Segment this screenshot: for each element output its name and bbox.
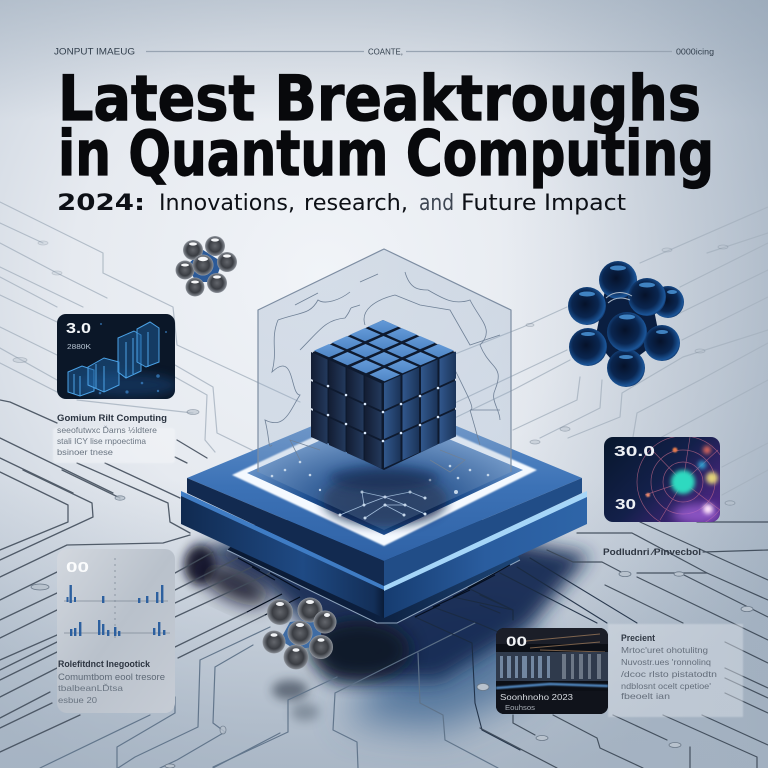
burst rings: [636, 437, 720, 522]
card: quantum burst image: 30.0: [614, 443, 655, 460]
card: signal chart: 00: [66, 559, 89, 576]
cube left faces: [311, 352, 382, 468]
title: Latest Breaktroughs: [58, 62, 701, 135]
upper slab: [187, 396, 582, 586]
panel: present: fbeoelt ian: [621, 691, 670, 701]
subtitle: and: [419, 191, 454, 216]
card: signal chart: Comumtbom eool tresore: [58, 672, 165, 682]
chart axes: [64, 558, 170, 640]
header strip: JONPUT IMAEUG: [54, 46, 135, 56]
icon: blue molecule right: [568, 261, 684, 387]
subtitle: 2024:: [57, 191, 145, 216]
text block: computing: bsinoer tnese: [57, 447, 113, 457]
isometric wireframe bars: [68, 322, 159, 396]
card: bar chart image: [57, 314, 178, 399]
text block: computing: stali ICY lise rnpoectima: [57, 436, 146, 446]
card: quantum burst image: [604, 437, 720, 522]
dotted floor glow: [78, 373, 178, 397]
header strip: [54, 46, 714, 56]
label: predictions: Podludnri ⁄Pinvecbol: [603, 547, 701, 557]
circuit traces: [0, 202, 768, 768]
lower slab: [181, 491, 587, 618]
panel: present: Precient: [621, 633, 655, 643]
panel: present: ndblosnt ocelt cpetioe': [621, 681, 711, 691]
text block: computing: Gomium Rilt Computing: [57, 413, 167, 423]
glass enclosure: [258, 249, 511, 530]
underside traces: [238, 558, 510, 617]
header strip: 0000icing: [676, 46, 714, 56]
subtitle: [57, 191, 626, 216]
server hall: [496, 628, 608, 714]
cube right faces: [384, 352, 456, 468]
panel: present: Nuvostr.ues 'ronnolinq: [621, 657, 711, 667]
text block: computing: seeofutwxc Ďarns ½ldtere: [57, 425, 157, 435]
icon: silver molecule bottom: [262, 598, 336, 670]
pool network: [271, 461, 489, 520]
qubit cube: [311, 320, 456, 490]
card: data centre image: [496, 628, 608, 714]
burst glow: [646, 446, 721, 524]
cube core: [313, 320, 455, 470]
card: data centre image: Soonhnoho 2023: [500, 692, 573, 702]
chart bars: [66, 585, 165, 636]
panel: present: [608, 624, 743, 717]
glow specks: [99, 323, 167, 394]
glass circuit traces: [265, 272, 500, 472]
card: bar chart image: 2880K: [67, 344, 91, 351]
card: data centre image: 00: [506, 633, 527, 649]
shadow under platform: [184, 520, 590, 730]
header strip: COANTE,: [368, 46, 403, 56]
card: signal chart: esbue 20: [58, 695, 97, 705]
title: [58, 62, 714, 190]
card: data centre image: Eouhsos: [505, 703, 535, 712]
card: signal chart: Rolefitdnct Inegootick: [58, 659, 151, 669]
subtitle: Innovations,: [159, 191, 295, 216]
cube top tiles: [314, 320, 454, 381]
glowing ring and pool: [232, 404, 537, 546]
subtitle: Future Impact: [461, 191, 626, 216]
panel: present: /dcoc rlsto pistatodtn: [621, 669, 717, 679]
subtitle: research,: [304, 191, 408, 216]
card: quantum burst image: 30: [615, 496, 636, 513]
cube joint lights: [327, 385, 439, 442]
card: signal chart: [57, 549, 175, 713]
card: signal chart: tbalbeanLĎtsa: [58, 683, 123, 693]
underside board: [227, 520, 520, 623]
panel: present: Mrtoc'uret ohotulitng: [621, 645, 708, 655]
icon: silver molecule top left: [176, 236, 237, 296]
text block: computing: [53, 413, 175, 463]
card: bar chart image: 3.0: [66, 320, 91, 337]
quantum platform: [181, 396, 587, 623]
